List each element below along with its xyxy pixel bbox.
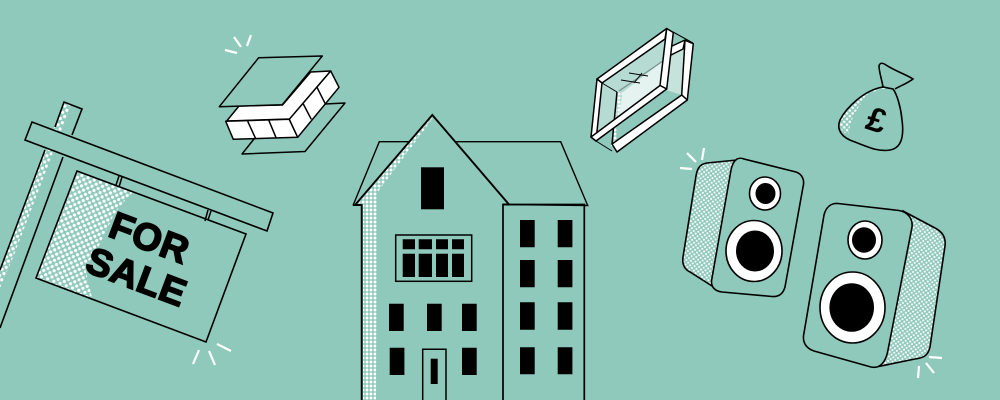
house <box>353 115 588 400</box>
main windows <box>389 304 477 375</box>
door <box>423 349 446 400</box>
spark lines: right speaker <box>918 357 942 378</box>
icon: double glazed window <box>591 28 693 152</box>
speaker side <box>683 160 737 286</box>
spark lines: bricks <box>225 35 251 53</box>
large window <box>396 235 472 281</box>
front pane glass <box>597 39 665 134</box>
gable fill <box>355 115 509 400</box>
pound sign: £ <box>862 100 891 142</box>
tweeter <box>750 177 780 210</box>
attic window <box>421 167 444 209</box>
wing windows <box>520 220 572 374</box>
lower sheet <box>242 103 345 154</box>
gable and wall <box>355 115 509 400</box>
speaker side <box>876 211 945 367</box>
front frame <box>591 28 673 141</box>
inner clear glass <box>618 62 662 120</box>
back frame <box>612 40 693 152</box>
crossbar <box>25 122 273 231</box>
speaker front <box>711 158 804 297</box>
spark lines: left speaker <box>680 148 704 169</box>
bag neck <box>879 63 913 89</box>
woofer <box>726 220 782 282</box>
tweeter <box>848 221 882 259</box>
wall shading <box>358 118 433 400</box>
right speaker <box>803 203 945 367</box>
for sale sign <box>0 102 273 342</box>
spark lines: sign <box>193 344 231 365</box>
woofer <box>820 272 885 343</box>
back left edge <box>611 92 623 146</box>
right wing <box>503 204 584 400</box>
back pane glass <box>666 42 686 95</box>
icon: money bag <box>839 63 913 150</box>
bag shading <box>840 88 888 135</box>
glazing detail <box>596 32 693 151</box>
sign text: FOR <box>103 205 195 273</box>
sign board <box>36 171 246 342</box>
white bricks <box>226 71 339 139</box>
icon: insulation bricks <box>219 56 345 154</box>
speaker front <box>803 203 912 367</box>
top sheet <box>219 56 322 107</box>
sign board: SALE <box>80 240 192 316</box>
back roof <box>353 142 588 206</box>
left speaker <box>683 158 804 297</box>
grey glazing line <box>619 48 682 91</box>
hangers <box>116 176 211 221</box>
sign post <box>0 102 82 328</box>
bag body <box>839 87 903 150</box>
